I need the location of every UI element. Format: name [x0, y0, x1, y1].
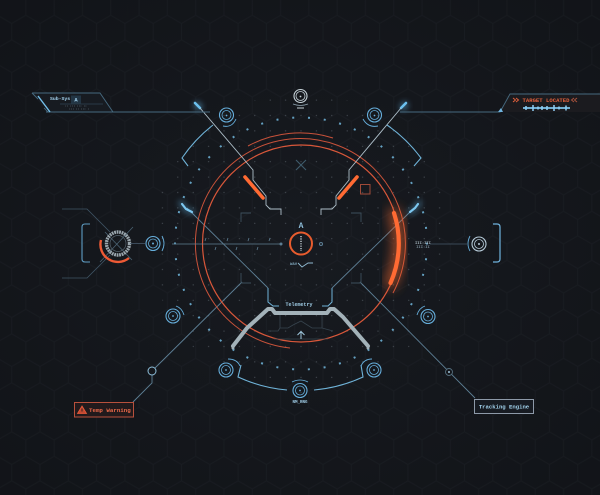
- node: left: [146, 236, 164, 251]
- node: top: [293, 90, 308, 108]
- node: bottom: [292, 380, 308, 405]
- center reticle: [280, 222, 322, 254]
- callout: tracking engine: [474, 400, 534, 414]
- lower bracket lines: [268, 288, 332, 306]
- top right panel: [400, 94, 600, 112]
- node: lower right: [417, 306, 435, 324]
- left ring module: [62, 209, 145, 278]
- x mark: [296, 160, 306, 170]
- node: bottom: NM_RNG: [292, 401, 308, 405]
- outer arcs: [182, 125, 421, 390]
- top left panel: Sub-Sys: [50, 96, 70, 102]
- wave mark: WAV: [290, 263, 298, 267]
- right bracket: [493, 224, 500, 262]
- top left panel: A: [74, 96, 78, 104]
- node: right: [430, 236, 486, 251]
- node: bottom left: [219, 359, 240, 377]
- upper diagonal arms: [195, 103, 407, 215]
- node: lower left: [166, 306, 184, 323]
- center reticle: A: [299, 222, 304, 231]
- right readout text: III:III: [415, 242, 431, 246]
- top left panel: :: ::: ::: ::: [65, 104, 87, 108]
- callout: temp warning: [74, 402, 134, 417]
- red rings: [195, 133, 405, 348]
- dotted ring: [175, 118, 427, 370]
- top left panel: ::: :: ::: :: [69, 108, 89, 111]
- top left panel: [32, 93, 210, 112]
- callout node: temp warning: [148, 367, 156, 375]
- callout: tracking engine: Tracking Engine: [479, 404, 530, 410]
- top right panel: TARGET LOCATED: [522, 97, 570, 104]
- lower structure with arrow: [268, 313, 333, 339]
- right readout text: III:II: [416, 246, 430, 250]
- dot grid: [151, 93, 451, 393]
- red square: [360, 184, 370, 194]
- callout: temp warning: Temp Warning: [89, 407, 131, 414]
- thick grey bridge: [232, 309, 369, 349]
- blue side tips: [181, 203, 419, 212]
- node: upper right: [363, 108, 382, 126]
- connector lines: [133, 208, 475, 402]
- callout node: tracking engine: [446, 368, 452, 376]
- orange highlight arc: [390, 213, 399, 283]
- telemetry label: Telemetry: [285, 302, 313, 308]
- node: bottom right: [361, 359, 381, 377]
- wave mark: [290, 263, 313, 267]
- right readout text: [415, 242, 431, 250]
- horizontal scale: [172, 238, 281, 250]
- node: upper left: [220, 108, 236, 126]
